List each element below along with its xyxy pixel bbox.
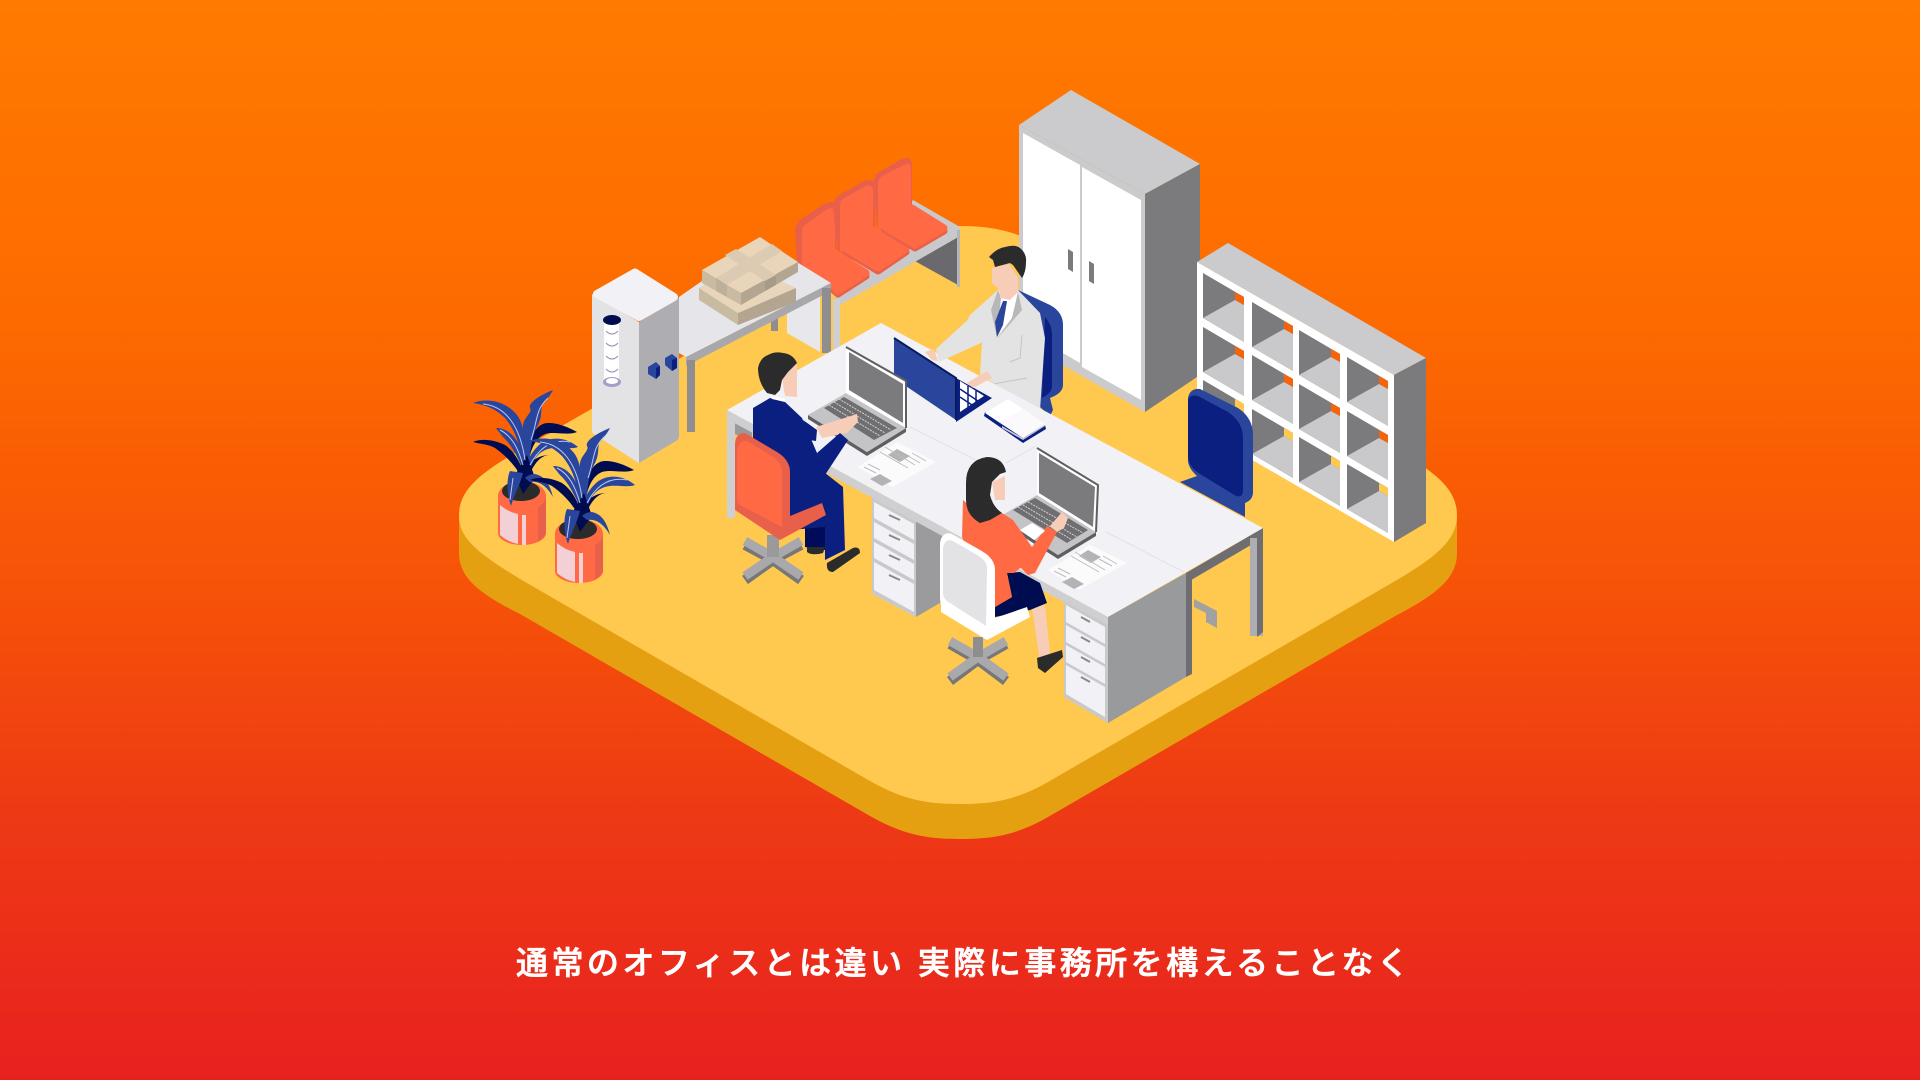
chair base bbox=[950, 637, 1006, 681]
drawer unit right bbox=[1064, 572, 1192, 723]
man in white coat with chair bbox=[965, 246, 1063, 416]
head bbox=[758, 352, 797, 402]
white office chair bbox=[940, 533, 1030, 681]
drawer unit left bbox=[872, 496, 945, 617]
coat arm and hands bbox=[925, 316, 992, 388]
platform bbox=[459, 226, 1457, 839]
bench frame bbox=[833, 200, 960, 350]
seat cushions bbox=[811, 208, 944, 294]
far leg bbox=[805, 520, 825, 554]
seat bbox=[735, 500, 826, 540]
body and near leg bbox=[753, 398, 860, 572]
arm and hands bbox=[803, 414, 858, 475]
pot bbox=[498, 481, 546, 545]
woman in orange bbox=[962, 457, 1068, 673]
pot bbox=[555, 519, 603, 583]
backrest bbox=[735, 433, 790, 530]
head bbox=[966, 457, 1006, 523]
bench bbox=[795, 158, 960, 350]
side table with boxes bbox=[679, 237, 831, 432]
empty blue chair bbox=[1180, 389, 1253, 517]
desk skirt and top bbox=[727, 323, 1263, 626]
blue chair behind bbox=[1018, 290, 1063, 416]
right leg bbox=[1186, 528, 1263, 637]
backrest bbox=[940, 533, 995, 632]
head bbox=[989, 246, 1026, 300]
chair base bbox=[745, 535, 801, 580]
coat body bbox=[965, 290, 1045, 410]
book bbox=[984, 399, 1046, 443]
seat backs bbox=[795, 158, 912, 277]
lower box bbox=[699, 262, 796, 325]
leg and shoe bbox=[1032, 605, 1063, 673]
seat bbox=[941, 600, 1030, 640]
leaves bbox=[530, 428, 635, 544]
caption: 通常のオフィスとは違い 実際に事務所を構えることなく bbox=[516, 945, 1409, 981]
bookshelf bbox=[1197, 243, 1426, 542]
laptop grey left bbox=[808, 347, 906, 456]
cup dispenser bbox=[603, 315, 621, 387]
plant left bbox=[473, 390, 578, 545]
man in navy suit bbox=[753, 352, 860, 572]
plant right bbox=[530, 428, 635, 583]
left leg bbox=[727, 414, 752, 518]
laptop grey right bbox=[999, 448, 1098, 559]
orange office chair bbox=[735, 433, 826, 580]
document right bbox=[1048, 545, 1127, 590]
water cooler bbox=[592, 272, 679, 463]
document left bbox=[858, 442, 936, 487]
skirt bbox=[995, 572, 1047, 617]
main desk bbox=[727, 323, 1263, 723]
upper box bbox=[702, 237, 798, 305]
table bbox=[679, 240, 831, 432]
hand and mouse pad bbox=[1020, 512, 1068, 540]
arm bbox=[1013, 520, 1057, 575]
torso bbox=[962, 500, 1030, 607]
laptop blue bbox=[894, 338, 992, 422]
cabinet bbox=[1019, 90, 1200, 412]
leaves bbox=[473, 390, 578, 506]
water taps bbox=[648, 354, 677, 379]
